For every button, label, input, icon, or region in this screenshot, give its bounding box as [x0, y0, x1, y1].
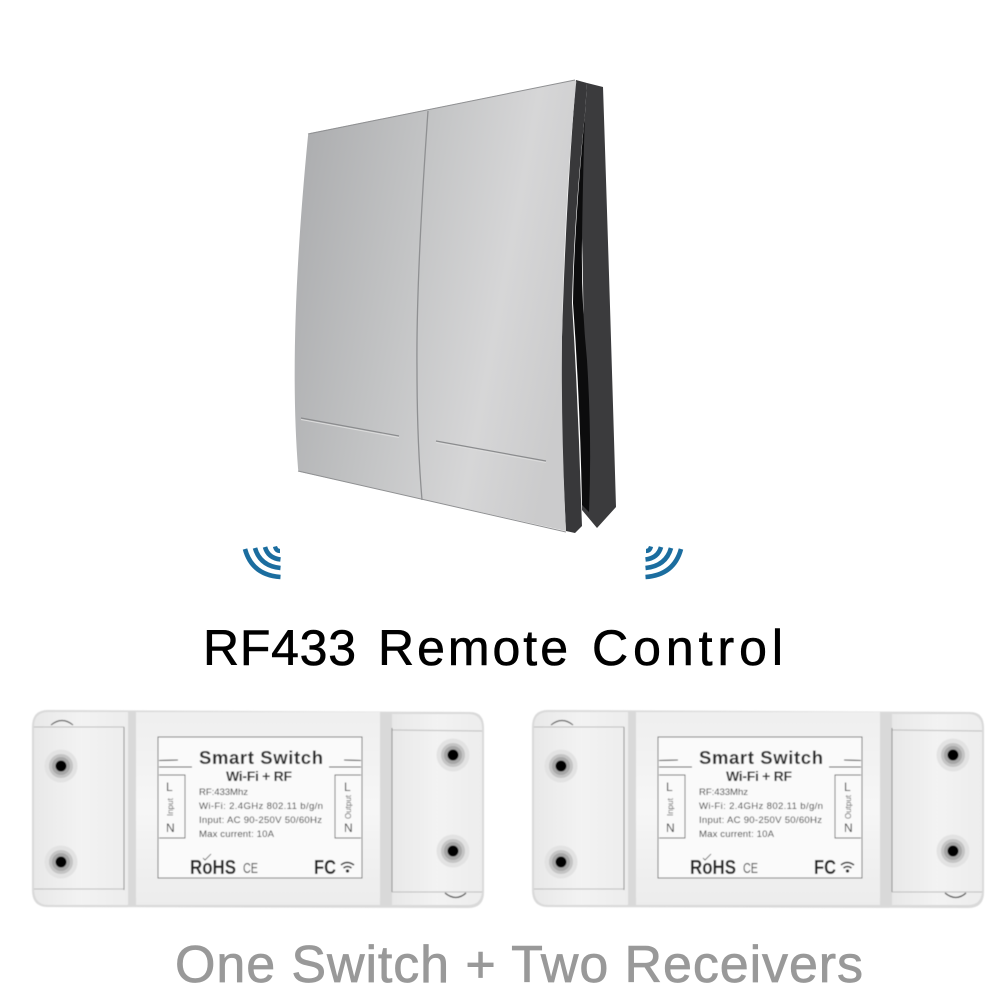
- certification marks: RoHS: [690, 857, 736, 879]
- switch face: [295, 80, 576, 531]
- receiver: left: [32, 710, 484, 908]
- rear dark rocker: [580, 83, 616, 528]
- receiver: right: [532, 710, 984, 908]
- output terminal: N: [844, 821, 853, 835]
- plate header rules: [159, 760, 361, 767]
- plate header rules: [659, 760, 861, 767]
- front dark rocker edge: [562, 80, 587, 533]
- caption: One Switch + Two Receivers: [175, 936, 863, 994]
- input terminal: L: [166, 780, 173, 794]
- specifications: RF:433Mhz: [699, 787, 748, 798]
- input terminal: Input: [666, 797, 675, 816]
- receiver body: [32, 710, 484, 908]
- plate subtitle: Wi-Fi + RF: [226, 768, 292, 784]
- input terminal: L: [666, 780, 673, 794]
- face edge shading: [298, 80, 575, 532]
- title: Remote: [378, 620, 568, 676]
- plate subtitle: Wi-Fi + RF: [726, 768, 792, 784]
- input terminal: [159, 775, 185, 838]
- certification marks: [690, 854, 854, 879]
- certification marks: RoHS: [190, 857, 236, 879]
- plate name: Smart Switch: [699, 747, 823, 768]
- specifications: Wi-Fi: 2.4GHz 802.11 b/g/n: [699, 801, 823, 812]
- certification marks: CE: [743, 860, 758, 877]
- screw bosses: [44, 738, 470, 878]
- title: RF433: [203, 620, 356, 676]
- icon: left wireless signal: [245, 546, 280, 577]
- label plate: [658, 737, 862, 879]
- title: [203, 620, 783, 676]
- input terminal: Input: [166, 797, 175, 816]
- specifications: Input: AC 90-250V 50/60Hz: [199, 815, 322, 826]
- output terminal: L: [844, 780, 851, 794]
- output terminal: [335, 775, 361, 838]
- input terminal: [659, 775, 685, 838]
- receiver body: [532, 710, 984, 908]
- specifications: [699, 787, 823, 840]
- input terminal: N: [666, 821, 675, 835]
- certification marks: CE: [243, 860, 258, 877]
- certification marks: FC: [814, 857, 836, 879]
- icon: wifi mark: [841, 862, 854, 872]
- screw bosses: [544, 738, 970, 878]
- specifications: [199, 787, 323, 840]
- icon: right wireless signal: [646, 546, 681, 577]
- output terminal: [835, 775, 861, 838]
- specifications: Input: AC 90-250V 50/60Hz: [699, 815, 822, 826]
- output terminal: N: [344, 821, 353, 835]
- plate name: Smart Switch: [199, 747, 323, 768]
- output terminal: Output: [344, 794, 353, 819]
- specifications: Max current: 10A: [199, 829, 275, 840]
- wall switch: [295, 80, 616, 533]
- title: Control: [592, 620, 783, 676]
- output terminal: Output: [844, 794, 853, 819]
- left button slot: [301, 418, 399, 438]
- input terminal: N: [166, 821, 175, 835]
- specifications: Max current: 10A: [699, 829, 775, 840]
- icon: wifi mark: [341, 862, 354, 872]
- centre seam: [417, 111, 428, 500]
- label plate: [158, 737, 362, 879]
- certification marks: [190, 854, 354, 879]
- specifications: RF:433Mhz: [199, 787, 248, 798]
- gap shadow: [573, 113, 590, 512]
- output terminal: L: [344, 780, 351, 794]
- certification marks: FC: [314, 857, 336, 879]
- right button slot: [436, 441, 546, 462]
- specifications: Wi-Fi: 2.4GHz 802.11 b/g/n: [199, 801, 323, 812]
